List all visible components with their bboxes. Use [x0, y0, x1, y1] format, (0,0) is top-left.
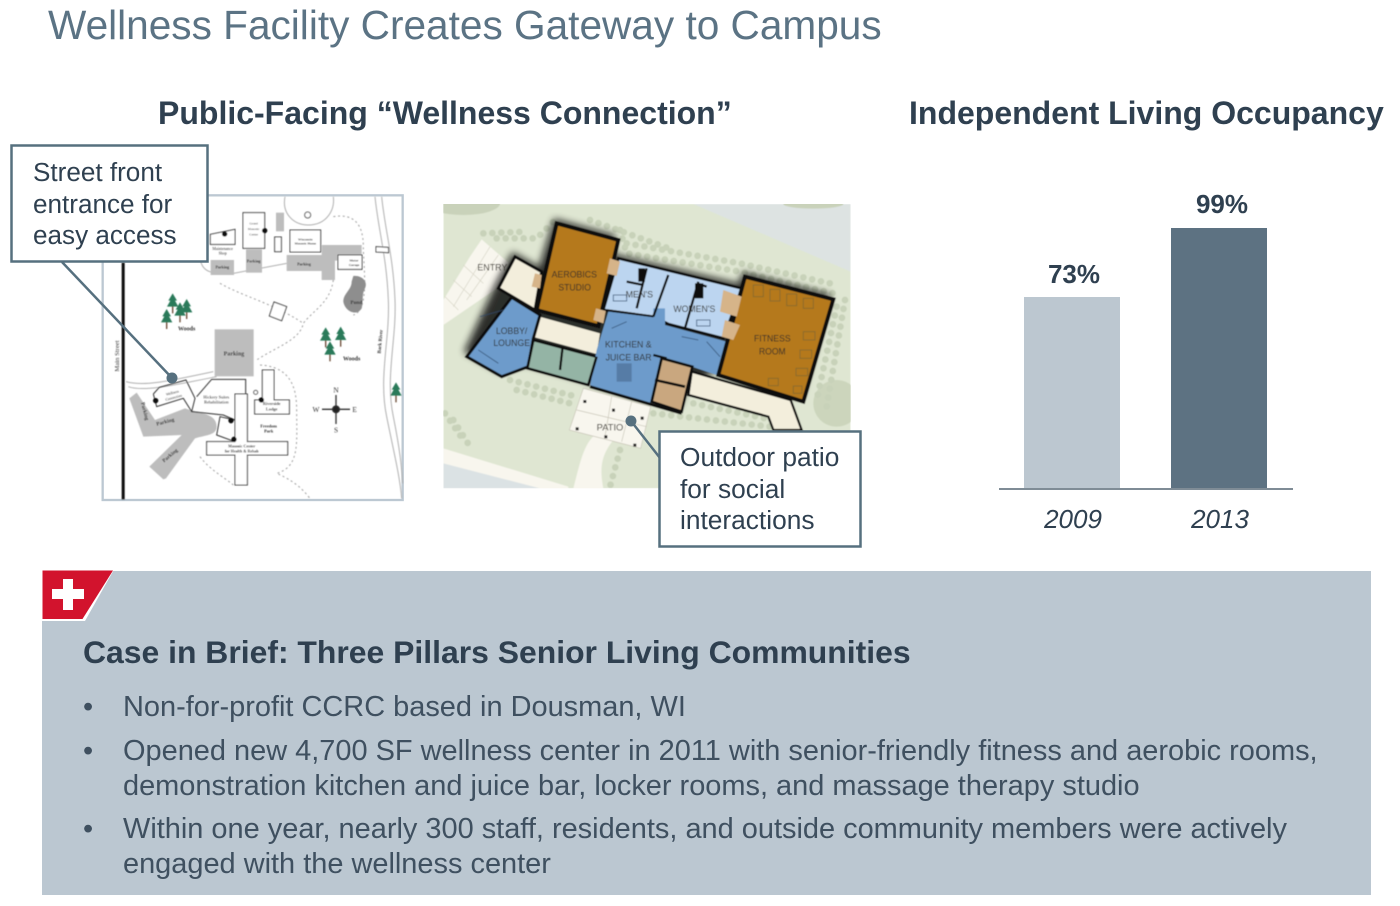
campus map: Wellness	[166, 389, 180, 397]
panel: case in brief	[42, 566, 1371, 895]
floor plan: MEN'S	[626, 290, 653, 300]
campus map	[103, 195, 403, 500]
heading: occupancy: Independent Living Occupancy	[909, 95, 1384, 131]
campus map: Riverside	[263, 401, 281, 406]
campus map: Bark River	[378, 329, 385, 354]
floor plan: ENTRY	[477, 263, 508, 273]
callout: street front entrance: easy access	[33, 220, 177, 250]
bar: 2009	[1024, 259, 1120, 534]
bullet list: •	[83, 691, 93, 723]
floor plan: STUDIO	[558, 283, 591, 293]
bullet list: Non-for-profit CCRC based in Dousman, WI	[123, 691, 686, 723]
bar: 2013	[1171, 189, 1267, 534]
campus map: S	[334, 426, 338, 435]
callout: outdoor patio	[626, 416, 860, 546]
floor plan: LOUNGE	[493, 338, 530, 348]
bar: 2009: 73%	[1048, 259, 1100, 289]
campus map: Parking	[161, 447, 180, 464]
bar: 2013: 2013	[1190, 504, 1249, 534]
campus map: Maintenance	[212, 246, 233, 251]
floor plan: FITNESS	[754, 334, 791, 344]
campus map: Hickory Suites	[203, 394, 230, 399]
campus map: Woods	[343, 357, 361, 363]
campus map: Rehabilitation	[204, 399, 229, 404]
bar: 2013: 99%	[1196, 189, 1248, 219]
campus map: Parking	[139, 402, 150, 421]
campus map: Parking	[247, 259, 261, 264]
campus map: Parking	[156, 417, 175, 428]
campus map: Grand	[250, 222, 258, 226]
callout: outdoor patio: for social	[680, 474, 785, 504]
campus map: Main Street	[114, 340, 121, 372]
floor plan: LOBBY/	[496, 326, 528, 336]
floor plan: KITCHEN &	[605, 339, 652, 349]
title: Wellness Facility Creates Gateway to Campus	[48, 2, 882, 48]
bullet list: •	[83, 735, 93, 767]
bullet list: Opened new 4,700 SF wellness center in 2011 with senior-friendly fitness and aerobic rooms,	[123, 735, 1318, 767]
callout: street front entrance	[12, 146, 208, 384]
campus map: Garage	[349, 263, 360, 267]
floor plan: ROOM	[759, 346, 786, 356]
callout: street front entrance: Street front	[33, 157, 163, 187]
bullet list	[83, 691, 1318, 880]
bar: 2009: 2009	[1043, 504, 1102, 534]
campus map: Wisconsin	[298, 237, 313, 241]
campus map: N	[333, 386, 339, 395]
campus map: Parking	[215, 265, 229, 270]
campus map: Pond	[350, 300, 362, 306]
campus map: Motor	[349, 259, 359, 263]
callout: outdoor patio: interactions	[680, 505, 814, 535]
campus map: Masonic	[248, 227, 260, 231]
campus map: Freedom	[260, 423, 277, 428]
campus map: W	[313, 405, 320, 414]
floor plan: AEROBICS	[552, 270, 597, 280]
campus map: Parking	[224, 352, 244, 358]
bullet list: engaged with the wellness center	[123, 848, 551, 880]
campus map: Park	[264, 428, 274, 433]
campus map: Masonic Home	[295, 241, 317, 245]
campus map: for Health & Rehab	[225, 449, 259, 454]
bullet list: Within one year, nearly 300 staff, residents, and outside community members were actively	[123, 813, 1287, 845]
panel heading: Case in Brief: Three Pillars Senior Living Communities	[83, 634, 911, 670]
bullet list: •	[83, 813, 93, 845]
callout: outdoor patio: Outdoor patio	[680, 442, 839, 472]
icon: red swiss cross flag	[42, 566, 116, 621]
bullet list: demonstration kitchen and juice bar, locker rooms, and massage therapy studio	[123, 770, 1140, 802]
campus map: Shop	[219, 251, 227, 256]
bar chart: occupancy	[999, 189, 1293, 534]
campus map: Masonic Center	[228, 443, 255, 448]
floor plan	[427, 192, 860, 488]
campus map: Center	[249, 232, 259, 236]
heading: wellness connection: Public-Facing “Wellness Connection”	[158, 95, 732, 131]
callout: street front entrance: entrance for	[33, 189, 173, 219]
campus map: E	[352, 405, 357, 414]
floor plan: WOMEN'S	[673, 304, 715, 314]
campus map: Parking	[297, 261, 311, 266]
floor plan: JUICE BAR	[606, 353, 652, 363]
floor plan: PATIO	[597, 423, 623, 433]
campus map: Woods	[178, 327, 196, 333]
campus map: Lodge	[266, 407, 278, 412]
campus map: Connection	[165, 394, 183, 402]
